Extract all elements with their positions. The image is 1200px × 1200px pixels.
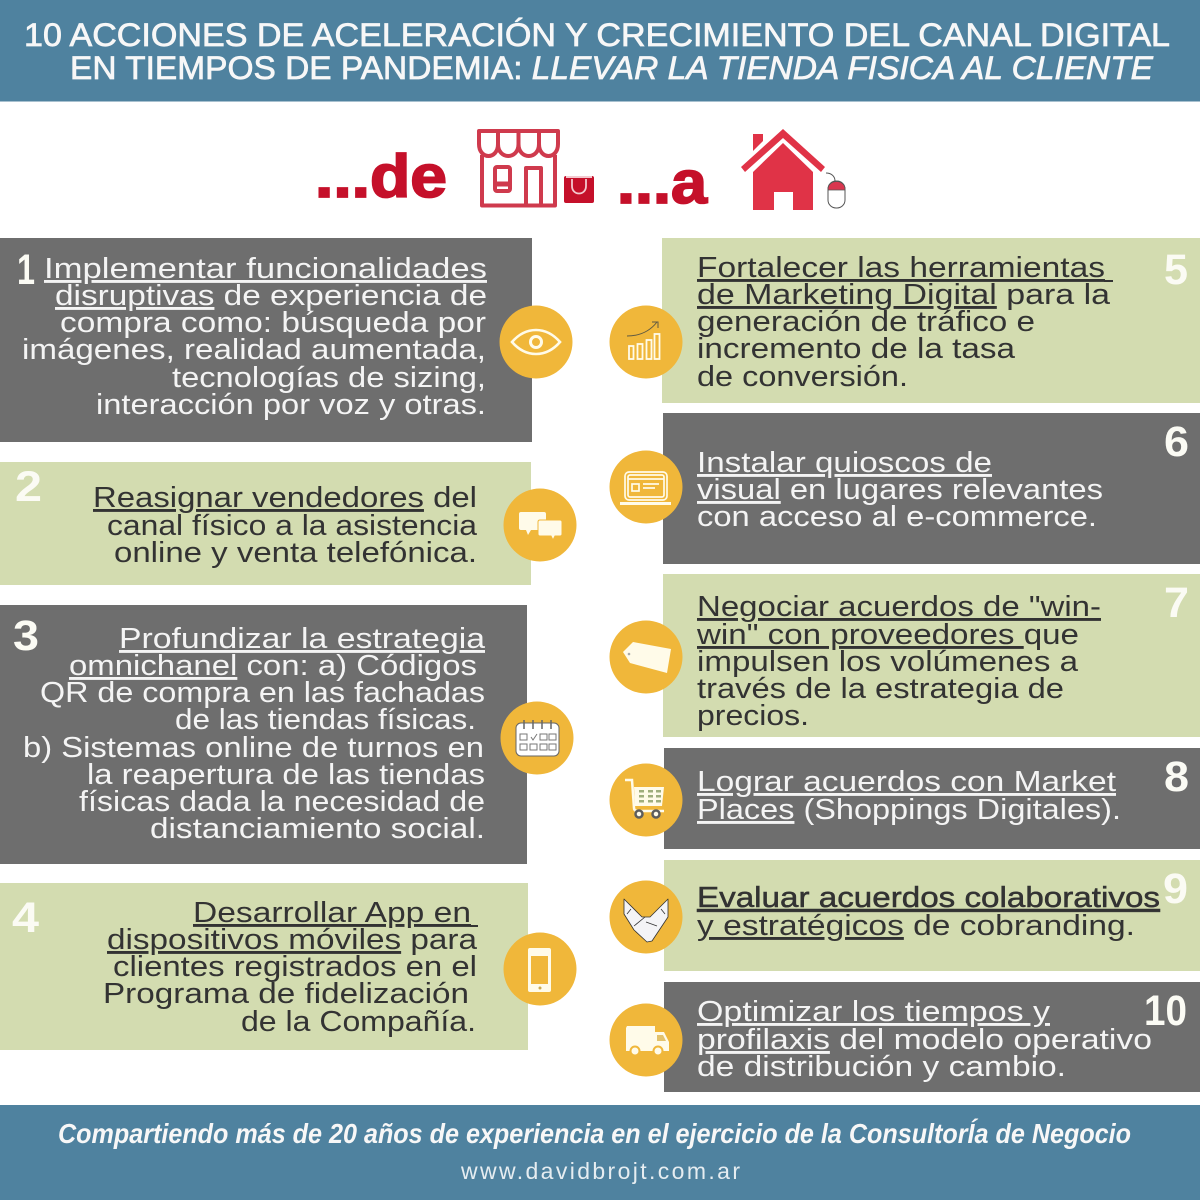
- icon: laptop: [610, 450, 682, 524]
- text block 1: compra como: búsqueda por: [60, 307, 486, 339]
- text block 3: físicas dada la necesidad de: [79, 786, 485, 818]
- text block 3: QR de compra en las fachadas: [40, 677, 485, 709]
- number 1: 1: [17, 246, 35, 294]
- footer banner: [0, 1105, 1200, 1200]
- label: de: ...de: [315, 143, 447, 210]
- text block 6: con acceso al e-commerce.: [697, 501, 1097, 533]
- text block 1: imágenes, realidad aumentada,: [22, 334, 486, 366]
- icon: mouse: [826, 173, 845, 208]
- text block 5: incremento de la tasa: [697, 333, 1016, 365]
- label: a: ...a: [617, 149, 708, 216]
- icon: calendar: [500, 702, 574, 774]
- text block 3: distanciamiento social.: [150, 813, 485, 845]
- text block 7: Negociar acuerdos de "win-: [697, 591, 1101, 623]
- text block 3: [23, 623, 486, 845]
- text block 7: precios.: [697, 700, 809, 732]
- text block 1: interacción por voz y otras.: [96, 389, 486, 421]
- panel 4: [0, 883, 528, 1050]
- number 9: 9: [1163, 865, 1188, 913]
- text block 2: [93, 482, 478, 569]
- text block 5: de Marketing Digital para la: [697, 279, 1111, 311]
- panel 1: [0, 238, 532, 442]
- number 2: 2: [15, 463, 42, 511]
- text block 1: tecnologías de sizing,: [172, 362, 486, 394]
- icon: price tag: [610, 620, 682, 694]
- text block 9: y estratégicos de cobranding.: [697, 910, 1135, 942]
- panel 10: [664, 982, 1200, 1092]
- text block 6: Instalar quioscos de: [697, 447, 992, 479]
- text block 4: de la Compañía.: [241, 1006, 476, 1038]
- panel 5: [662, 238, 1200, 403]
- text block 2: canal físico a la asistencia: [107, 510, 478, 542]
- text block 1: Implementar funcionalidades: [44, 253, 487, 285]
- text block 1: [22, 253, 487, 421]
- text block 4: [103, 897, 478, 1038]
- icon: growth chart: [610, 306, 682, 378]
- panel 8: [664, 748, 1200, 849]
- number 7: 7: [1164, 579, 1189, 627]
- title line 2: EN TIEMPOS DE PANDEMIA: LLEVAR LA TIENDA FISICA AL CLIENTE: [70, 50, 1154, 86]
- text block 3: omnichanel con: a) Códigos: [69, 650, 477, 682]
- text block 7: win" con proveedores que: [696, 619, 1079, 651]
- icon: store: [479, 131, 558, 206]
- text block 5: [697, 252, 1113, 393]
- text block 8: Places (Shoppings Digitales).: [697, 794, 1121, 826]
- text block 1: disruptivas de experiencia de: [55, 280, 487, 312]
- text block 3: Profundizar la estrategia: [119, 623, 486, 655]
- text block 8: [697, 766, 1121, 826]
- text block 5: generación de tráfico e: [697, 306, 1035, 338]
- panel 3: [0, 605, 527, 864]
- number 3: 3: [13, 612, 39, 660]
- icon: shopping bag: [564, 176, 594, 203]
- icon: delivery truck: [610, 1004, 682, 1076]
- text block 10: [697, 996, 1152, 1083]
- icon: eye: [500, 306, 572, 378]
- text block 9: [697, 882, 1160, 942]
- text block 4: clientes registrados en el: [113, 951, 477, 983]
- text block 9: Evaluar acuerdos colaborativos: [697, 882, 1160, 914]
- number 8: 8: [1164, 753, 1189, 801]
- text block 2: Reasignar vendedores del: [93, 482, 477, 514]
- text block 7: impulsen los volúmenes a: [697, 646, 1079, 678]
- footer url: www.davidbrojt.com.ar: [460, 1158, 740, 1184]
- text block 6: [697, 447, 1103, 533]
- title line 1: 10 ACCIONES DE ACELERACIÓN Y CRECIMIENTO DEL CANAL DIGITAL: [24, 17, 1170, 53]
- text block 5: Fortalecer las herramientas: [697, 252, 1105, 284]
- icon: shopping cart: [610, 764, 682, 836]
- icon: house: [741, 129, 825, 210]
- panel 9: [664, 860, 1200, 971]
- text block 10: de distribución y cambio.: [697, 1051, 1066, 1083]
- text block 4: Programa de fidelización: [103, 978, 469, 1010]
- icon: handshake: [610, 880, 682, 954]
- icon: smartphone: [504, 932, 576, 1006]
- panel 6: [663, 413, 1200, 564]
- text block 7: [696, 591, 1101, 732]
- text block 5: de conversión.: [697, 361, 908, 393]
- text block 3: de las tiendas físicas.: [175, 704, 476, 736]
- text block 4: Desarrollar App en: [193, 897, 471, 929]
- number 5: 5: [1164, 246, 1188, 294]
- text block 10: Optimizar los tiempos y: [697, 996, 1051, 1028]
- text block 8: Lograr acuerdos con Market: [697, 766, 1116, 798]
- text block 2: online y venta telefónica.: [114, 537, 477, 569]
- icon: chat bubbles: [504, 488, 576, 562]
- text block 6: visual en lugares relevantes: [697, 474, 1103, 506]
- number 10: 10: [1144, 987, 1187, 1035]
- number 4: 4: [12, 894, 39, 942]
- text block 3: b) Sistemas online de turnos en: [23, 732, 484, 764]
- text block 3: la reapertura de las tiendas: [87, 759, 485, 791]
- panel 7: [663, 574, 1200, 737]
- text block 7: través de la estrategia de: [697, 673, 1064, 705]
- text block 4: dispositivos móviles para: [107, 924, 478, 956]
- panel 2: [0, 462, 531, 585]
- header banner: [0, 0, 1200, 102]
- text block 10: profilaxis del modelo operativo: [697, 1024, 1152, 1056]
- number 6: 6: [1164, 418, 1189, 466]
